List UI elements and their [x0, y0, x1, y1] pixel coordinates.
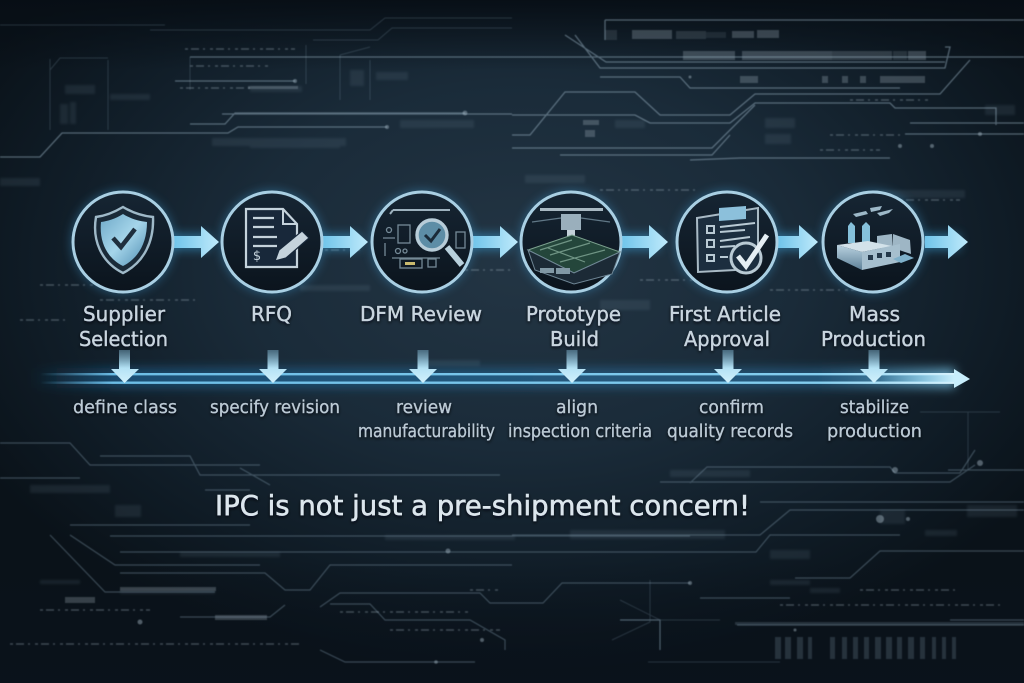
arrow: prototype build to first article approval	[621, 225, 668, 259]
down arrow 2	[259, 350, 287, 383]
label: Mass Production: Production	[821, 327, 926, 351]
label: Mass Production: Mass	[849, 302, 900, 326]
arrow: first article approval to mass production	[778, 225, 818, 259]
caption: define class: define class	[73, 398, 177, 418]
caption: stabilize production: stabilize	[840, 398, 909, 418]
label: First Article Approval: Approval	[684, 327, 770, 351]
action captions	[73, 398, 922, 442]
caption: align inspection criteria: inspection criteria	[508, 422, 652, 442]
label: RFQ: RFQ	[251, 302, 292, 326]
caption: confirm quality records	[667, 398, 793, 442]
step 2 icon: RFQ document with pencil	[222, 192, 322, 292]
caption: confirm quality records: confirm	[699, 398, 764, 418]
step 6 icon: mass production factory	[823, 192, 923, 292]
label: Prototype Build	[526, 302, 621, 351]
caption: confirm quality records: quality records	[667, 422, 793, 442]
caption: review manufacturability: review	[396, 398, 452, 418]
label: First Article Approval: First Article	[669, 302, 781, 326]
caption: stabilize production	[827, 398, 922, 442]
arrow: after mass production	[925, 225, 968, 259]
main traces	[0, 20, 1024, 160]
step 2 icon: RFQ document with pencil: $	[253, 249, 261, 264]
caption: align inspection criteria: align	[556, 398, 598, 418]
down arrow 4	[558, 350, 586, 383]
horizontal process arrows	[170, 225, 968, 259]
label: Prototype Build: Prototype	[526, 302, 621, 326]
caption: specify revision: specify revision	[210, 398, 340, 418]
label: First Article Approval	[669, 302, 781, 351]
label: Prototype Build: Build	[550, 327, 599, 351]
barcode band lower right	[735, 622, 1024, 659]
label: Supplier Selection: Supplier	[83, 302, 166, 326]
down arrow 6	[860, 350, 888, 383]
label: DFM Review: DFM Review	[360, 302, 482, 326]
label: Supplier Selection: Selection	[79, 327, 168, 351]
step 4 icon: prototype build machine and PCB	[521, 192, 621, 292]
label: Mass Production	[821, 302, 926, 351]
caption: review manufacturability: manufacturability	[358, 422, 495, 442]
step labels	[79, 302, 926, 351]
arrow: RFQ to DFM review	[322, 226, 368, 258]
caption: stabilize production: production	[827, 422, 922, 442]
down arrow 3	[409, 350, 437, 383]
down arrows to the timeline	[111, 350, 888, 383]
glow behind step circles	[71, 190, 925, 294]
down arrow 5	[714, 350, 742, 383]
down arrow 1	[111, 350, 139, 383]
timeline arrow	[30, 368, 970, 388]
caption: review manufacturability	[358, 398, 495, 442]
arrow: DFM review to prototype build	[472, 226, 518, 258]
label: Supplier Selection	[79, 302, 168, 351]
step 3 icon: DFM review magnifier over board	[372, 192, 472, 292]
step 1 icon: supplier selection shield	[73, 192, 173, 292]
step 5 icon: first article approval checklist	[677, 192, 777, 292]
arrow: supplier selection to RFQ	[173, 226, 219, 258]
headline statement: IPC is not just a pre-shipment concern!	[215, 490, 750, 522]
caption: align inspection criteria	[508, 398, 652, 442]
